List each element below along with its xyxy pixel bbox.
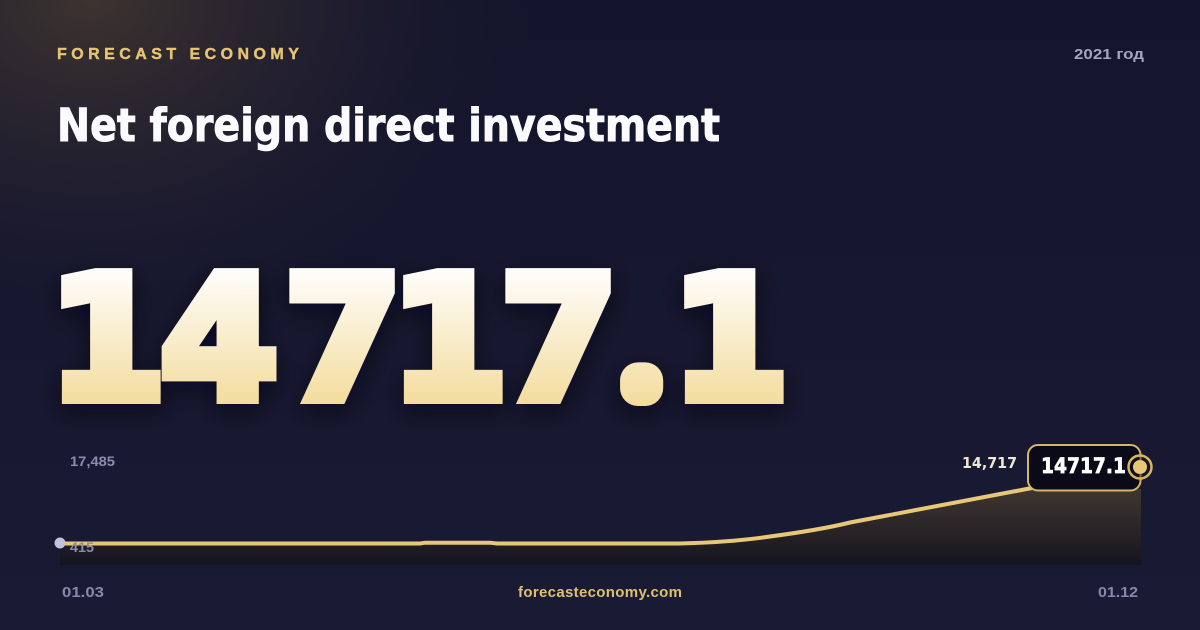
brand label: FORECAST ECONOMY (57, 46, 303, 63)
end value label: 14,717 (962, 454, 1017, 472)
value badge (1028, 445, 1140, 490)
axis min label: 415 (70, 539, 94, 555)
big value: 14717 (48, 241, 618, 439)
end date: 01.12 (1098, 584, 1138, 601)
end point marker (1128, 456, 1152, 478)
start point (54, 538, 66, 548)
big value: . (634, 352, 649, 398)
line chart (54, 488, 1141, 565)
big value: 1 (671, 241, 789, 439)
year label: 2021 год (1074, 46, 1145, 63)
chart area fill (60, 489, 1141, 565)
source url: forecasteconomy.com (518, 584, 682, 601)
chart line (60, 488, 1032, 544)
axis max label: 17,485 (70, 453, 115, 469)
value badge: 14717.1 (1041, 454, 1126, 479)
start date: 01.03 (62, 584, 104, 601)
title: Net foreign direct investment (57, 99, 720, 152)
